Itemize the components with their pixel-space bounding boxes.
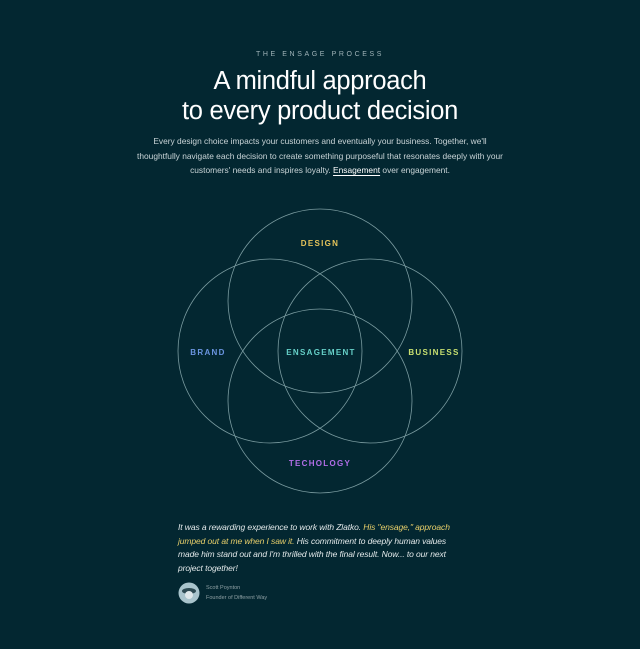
- testimonial quote: project together!: [178, 563, 238, 573]
- testimonial quote: jumped out at me when I saw it. His commitment to deeply human values: [178, 536, 446, 546]
- label: engagement: ENSAGEMENT: [286, 348, 356, 357]
- testimonial quote: [177, 522, 450, 573]
- title: A mindful approach: [214, 67, 426, 95]
- label: technology: TECHOLOGY: [289, 459, 351, 468]
- intro text: Every design choice impacts your customers and eventually your business. Together, we'll: [153, 136, 487, 146]
- author: [178, 582, 267, 604]
- author name: [206, 585, 267, 601]
- intro text: [137, 136, 503, 176]
- title: to every product decision: [182, 97, 458, 125]
- author name: Scott Poynton: [206, 585, 240, 591]
- testimonial quote: made him stand out and I'm thrilled with the final result. Now... to our next: [178, 549, 446, 559]
- icon: avatar: [178, 582, 200, 604]
- intro text: thoughtfully navigate each decision to create something purposeful that resonates deeply with your: [137, 150, 503, 160]
- intro text: customers' needs and inspires loyalty. Ensagement over engagement.: [190, 165, 450, 175]
- author name: Founder of Different Way: [206, 595, 267, 601]
- label: business: BUSINESS: [408, 348, 460, 357]
- label: design: DESIGN: [301, 239, 339, 248]
- label: brand: BRAND: [190, 348, 226, 357]
- testimonial quote: It was a rewarding experience to work with Zlatko. His "ensage," approach: [178, 522, 450, 532]
- eyebrow: THE ENSAGE PROCESS: [256, 51, 384, 58]
- title: [182, 67, 458, 125]
